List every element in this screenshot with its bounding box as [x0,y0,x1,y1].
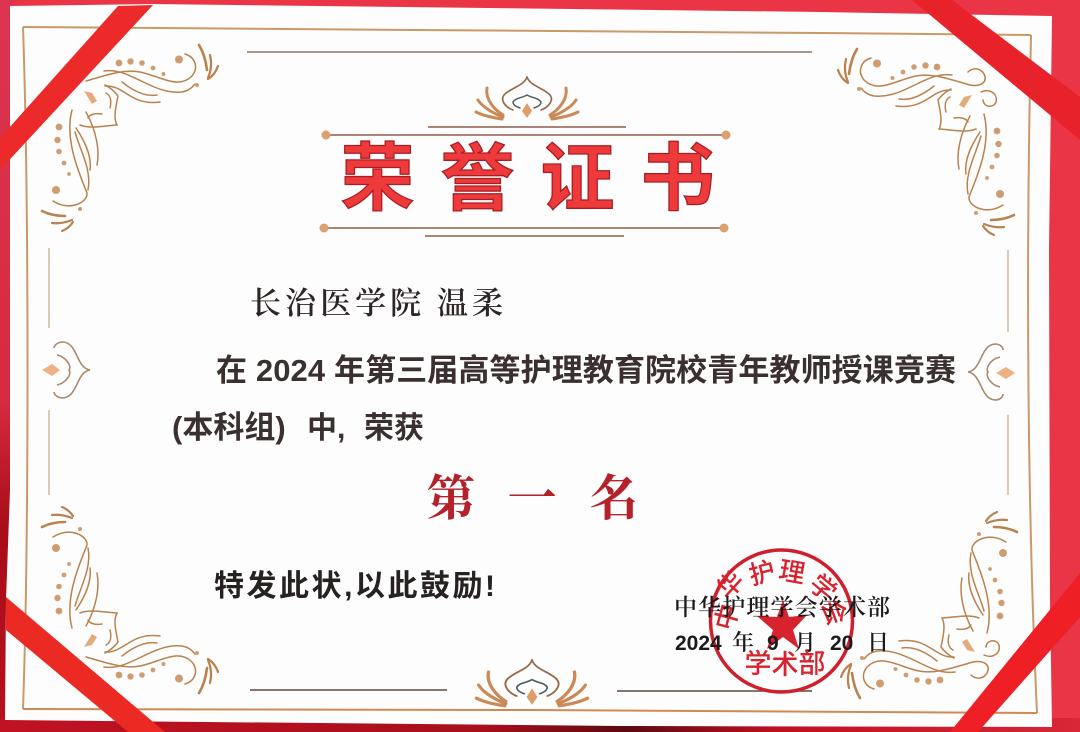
award text line 2: 中, [307,412,345,445]
date: 年 [732,630,754,655]
award text line 2: 荣获 [364,412,424,445]
title: 荣 [340,137,414,220]
side ornament: left [42,342,90,398]
award rank [426,471,639,526]
red seal: 理 [777,555,807,589]
lotus ornament: top [476,77,578,119]
encouragement text: 特发此状,以此鼓励! [214,570,495,603]
lotus ornament: bottom [476,660,588,706]
red seal: 部 [798,649,826,679]
award text line 1: 在 2024 年第三届高等护理教育院校青年教师授课竞赛 [216,353,956,388]
red seal: 术 [772,650,798,680]
ribbon: bottom right [950,573,1080,732]
title: 证 [540,137,614,220]
red seal: 学 [803,568,843,608]
bottom rules [250,690,812,691]
red seal: 学 [744,649,772,679]
red seal [709,550,853,692]
award rank: 第 [426,471,476,526]
date: 9 [767,632,779,655]
red seal: 华 [710,565,750,605]
left red strip [0,0,14,732]
title: 誉 [440,137,514,220]
side ornament: right [968,344,1015,400]
red seal: 中 [709,601,745,633]
title [340,137,714,220]
ribbon: top right [912,0,1080,140]
corner ornament: bottom right [841,512,1017,698]
corner ornament: top left [42,45,218,231]
top rule [247,51,812,53]
corner ornament: top right [838,49,1014,235]
date: 日 [867,630,889,655]
issuer: 中华护理学会学术部 [674,595,890,620]
red seal: 会 [815,595,853,629]
bottom dark red edge [0,718,1080,732]
date: 月 [794,630,816,655]
award rank: 一 [507,471,557,526]
date: 20 [830,632,853,655]
date: 2024 [675,632,722,655]
frame inner side ticks [49,248,1008,495]
title: 书 [640,137,714,220]
recipient name: 长治医学院 温柔 [250,286,503,321]
title rules [320,127,730,236]
award text line 2: (本科组) [172,410,286,445]
ribbon: bottom left [6,597,165,732]
corner ornament: bottom left [42,507,218,693]
award rank: 名 [589,471,639,526]
ribbon: top left [0,5,153,170]
red seal: 护 [746,555,778,591]
